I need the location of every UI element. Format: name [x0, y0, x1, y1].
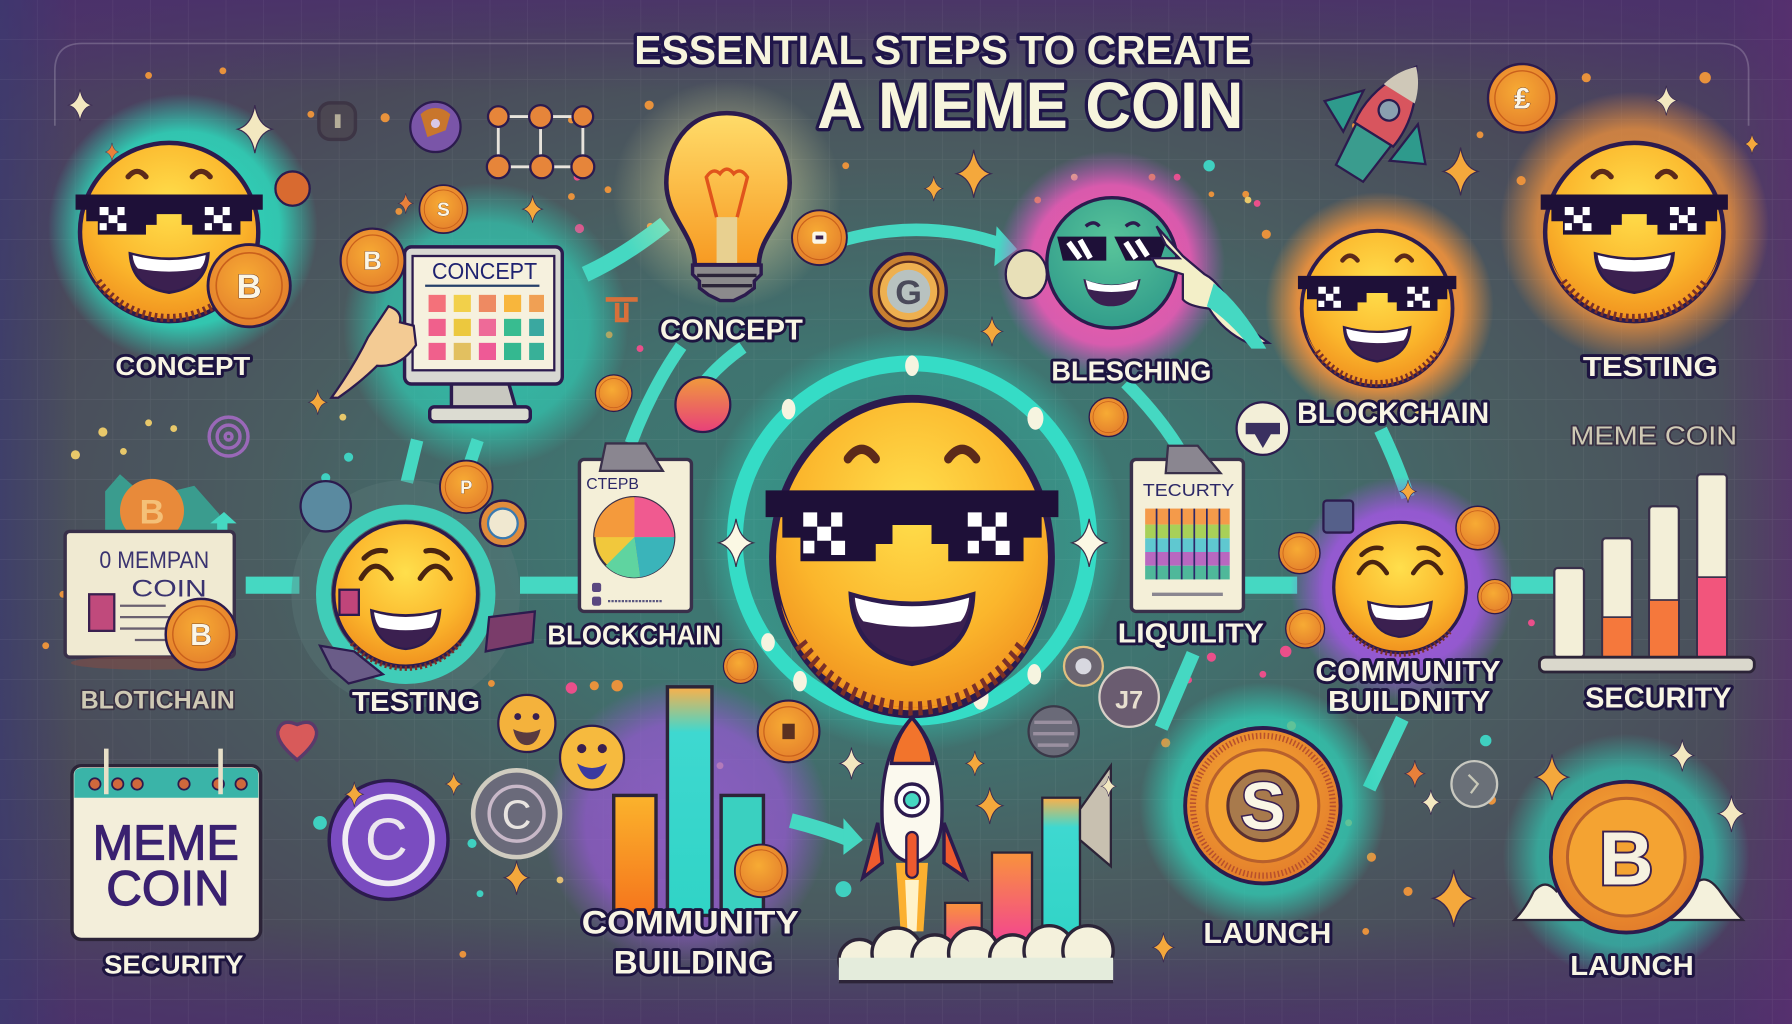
- panel: doc with pie: CTEPB: [586, 476, 639, 493]
- panel: launch coin B: [1503, 734, 1750, 981]
- label: community building 2: BUILDING: [614, 945, 774, 981]
- icon: coin B: B: [363, 248, 382, 276]
- panel: left card: COIN: [131, 576, 207, 603]
- icon: happy smiley: [1334, 522, 1466, 654]
- icon: small coin: [758, 701, 819, 762]
- connectors: [246, 346, 1554, 789]
- icon: bitcoin coin: B: [190, 618, 212, 652]
- label: blockchain: BLOCKCHAIN: [1297, 397, 1489, 430]
- icon: blockchain smiley: [1298, 231, 1456, 386]
- icon: S coin: [1185, 728, 1341, 883]
- bar chart: community: [543, 680, 829, 966]
- icon: ring coin: [480, 501, 526, 546]
- icon: grey coin: [1451, 761, 1497, 807]
- label: launch 2: LAUNCH: [1570, 950, 1694, 981]
- icon: blue coin: [301, 481, 351, 531]
- label: blockchain faded: BLOTICHAIN: [81, 687, 235, 715]
- icon: clouds: [1514, 879, 1743, 920]
- icon: fist: [1006, 250, 1047, 298]
- icon: bitcoin coin: [166, 599, 237, 670]
- panel: security doc: TECURTY: [1143, 480, 1235, 500]
- icon: coin 2: [1099, 667, 1159, 727]
- icon: small coin 2: [723, 649, 758, 683]
- panel: central coin: [701, 329, 1123, 752]
- panel: concept smiley coin: [48, 94, 318, 363]
- icon: spiral coin: [209, 417, 248, 456]
- panel: security doc: [1131, 446, 1243, 611]
- panel: calendar: MEME: [93, 816, 239, 870]
- colour grid: [1145, 509, 1230, 579]
- icon: smiling coin with pixel sunglasses: [76, 143, 263, 321]
- icon: rocket top: [1299, 35, 1467, 205]
- bar chart: right: [1539, 474, 1754, 672]
- icon: coin: [735, 845, 787, 897]
- icon: clouds: [839, 926, 1113, 982]
- icon: bitcoin coin: B: [237, 268, 262, 306]
- panel: community coin: [1279, 477, 1514, 701]
- icon: node network: [487, 105, 594, 178]
- icon: gold G coin: G: [895, 274, 922, 312]
- panel: testing coin: [1499, 91, 1769, 361]
- icon: happy smiley: [334, 522, 478, 668]
- panel: blockchain coin: [1265, 192, 1494, 421]
- icon: coin B: [341, 229, 405, 293]
- icon: faded padlock: [319, 103, 355, 139]
- icon: monitor: CONCEPT: [432, 258, 537, 284]
- icon: coin top right: ₤: [1514, 83, 1531, 116]
- icon: purple copyright coin: C: [365, 805, 408, 872]
- icon: gold G coin: [871, 254, 946, 329]
- icon: green smiley: [1047, 198, 1177, 328]
- icon: grey copyright coin: C: [502, 792, 531, 838]
- icon: purple coin: [410, 102, 461, 152]
- label: bleaching: BLESCHING: [1051, 356, 1211, 387]
- small coins: [1279, 533, 1320, 574]
- label: community building: COMMUNITY: [1315, 656, 1501, 688]
- icon: small coin: [595, 375, 632, 411]
- title: A MEME COIN: [817, 69, 1243, 143]
- icon: ribbon right: [486, 611, 535, 651]
- icon: coin stack: B: [140, 493, 164, 531]
- icon: grey copyright coin: [473, 770, 560, 857]
- icon: B coin: B: [1599, 816, 1654, 900]
- ring markers: [761, 355, 1043, 710]
- arrow: bulb to green coin: [843, 226, 1017, 266]
- label: testing 2: TESTING: [352, 686, 480, 717]
- icon: coin stack: [105, 474, 237, 543]
- panel: calendar: [72, 749, 261, 939]
- title: [634, 27, 1251, 143]
- icon: coin: [440, 461, 493, 513]
- icon: purple copyright coin: [329, 781, 448, 899]
- panel: left card: [65, 474, 237, 670]
- icon: monitor: [405, 247, 562, 422]
- icon: small coin orange: [1089, 398, 1128, 437]
- label: launch: LAUNCH: [1203, 918, 1331, 950]
- icon: white badge: [1237, 402, 1289, 455]
- panel: launch bars: [945, 766, 1111, 958]
- label: security 2: SECURITY: [104, 950, 244, 980]
- arrow: monitor to bulb: [585, 224, 665, 274]
- panel: calendar: COIN: [106, 862, 230, 916]
- icon: bitcoin coin: [208, 245, 290, 327]
- icon: ribbon left: [320, 646, 383, 683]
- icon: rocket: [863, 718, 966, 931]
- icon: hand: [331, 306, 416, 398]
- panel: left card: 0 MEMPAN: [99, 547, 209, 574]
- label: testing: TESTING: [1583, 351, 1718, 382]
- label: security: SECURITY: [1585, 682, 1731, 714]
- label: community building 2: COMMUNITY: [582, 905, 799, 941]
- title: ESSENTIAL STEPS TO CREATE: [634, 27, 1251, 73]
- icon: light bulb: [613, 80, 841, 309]
- icon: small smiley 1: [498, 695, 555, 752]
- panel: monitor: [331, 183, 629, 469]
- icon: small block: [339, 590, 359, 615]
- label: blockchain 2: BLOCKCHAIN: [547, 620, 721, 651]
- pie chart: [594, 497, 674, 578]
- icon: coin: [792, 210, 847, 265]
- label: community building 2: [582, 905, 799, 981]
- icon: small smiley 2: [560, 726, 624, 790]
- icon: coin 2: J7: [1115, 687, 1143, 715]
- arrow: chart to rocket: [791, 818, 863, 855]
- icon: coin S: [419, 185, 467, 233]
- icon: small bracket: [606, 299, 638, 320]
- icon: big smiley coin: [766, 399, 1058, 714]
- icon: testing smiley: [1541, 143, 1728, 321]
- icon: coin S: S: [437, 200, 450, 221]
- panel: green coin: [997, 151, 1269, 379]
- icon: coin top right: [1488, 64, 1557, 133]
- icon: heart: [278, 722, 317, 760]
- label: concept 2: CONCEPT: [660, 314, 803, 346]
- icon: coin: P: [460, 476, 472, 497]
- icon: torn coin: [275, 171, 310, 206]
- label: community building: [1315, 656, 1501, 718]
- icon: coin 1: [1064, 647, 1103, 686]
- card: [65, 531, 234, 657]
- icon: B coin: [1551, 782, 1702, 933]
- label: community building: BUILDNITY: [1328, 686, 1490, 718]
- panel: launch coin S: [1139, 682, 1386, 929]
- label: meme coin faded: MEME COIN: [1570, 421, 1737, 451]
- label: concept: CONCEPT: [115, 351, 250, 381]
- panel: testing ring coin: [291, 461, 535, 709]
- icon: gradient ball: [675, 377, 730, 432]
- label: liquidity: LIQUILITY: [1118, 617, 1264, 648]
- icon: striped coin: [1029, 706, 1079, 757]
- icon: S coin: S: [1241, 770, 1285, 844]
- panel: doc with pie: [579, 443, 691, 611]
- icon: pointing hand: [1152, 226, 1269, 343]
- icon: clipboard: [579, 459, 691, 611]
